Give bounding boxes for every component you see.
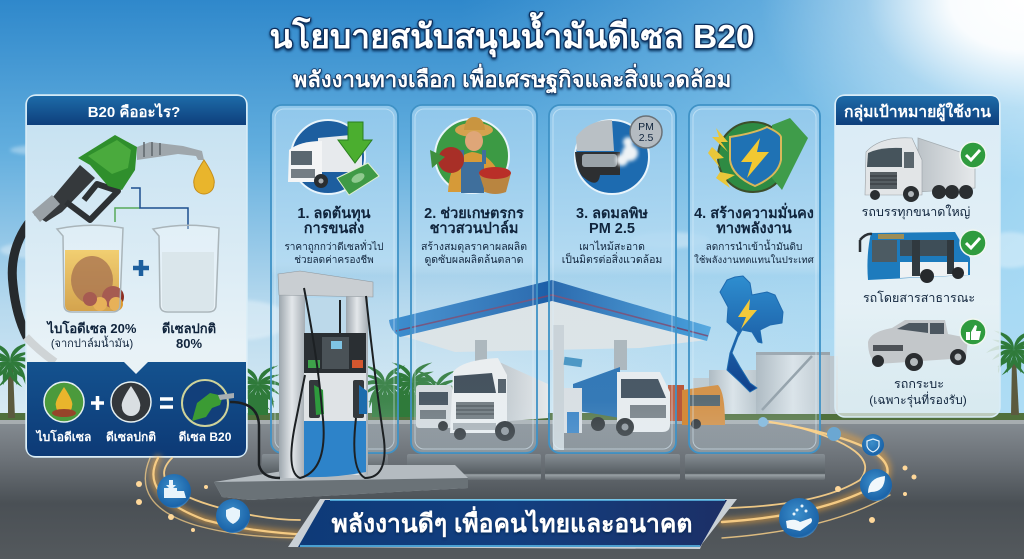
- label: รถบรรทุกขนาดใหญ่: [862, 205, 970, 220]
- icon: farmer with palm fruit: [430, 117, 511, 194]
- background sky: [0, 0, 1024, 425]
- icon: check: [960, 230, 986, 256]
- description line 2: ดูดซับผลผลิตล้นตลาด: [424, 254, 524, 266]
- label: รถกระบะ: [894, 377, 944, 391]
- description line 2: ช่วยลดค่าครองชีพ: [294, 254, 374, 266]
- benefit cards: [262, 105, 825, 480]
- icon: bus: [860, 232, 970, 283]
- icon: hand bubble: [779, 498, 819, 538]
- equals: [160, 399, 173, 407]
- icon: fuel nozzle: [32, 135, 204, 222]
- label note: (เฉพาะรุ่นที่รองรับ): [869, 391, 967, 408]
- icon: truck with down arrow and money: [288, 120, 379, 195]
- card 3: PM 2.5: PM 2.5: [589, 221, 635, 237]
- equation box: [27, 362, 246, 456]
- icon: biodiesel: [44, 382, 84, 422]
- description line 2: ใช้พลังงานทดแทนในประเทศ: [694, 254, 814, 266]
- icon: tiny bubble: [758, 417, 768, 427]
- equation box: ดีเซล B20: [179, 430, 232, 444]
- diesel beaker: [153, 225, 219, 312]
- card base stands: [262, 454, 825, 480]
- heading: 3. ลดมลพิษ: [576, 205, 648, 222]
- diesel label: ดีเซลปกติ: [162, 321, 216, 336]
- diesel label: 80%: [176, 336, 202, 351]
- heading: 4. สร้างความมั่นคง: [694, 202, 814, 222]
- left panel: what is B20: [12, 95, 247, 457]
- icon: diesel: [111, 382, 151, 422]
- small white truck: [416, 385, 452, 431]
- icon: pickup: [868, 320, 968, 371]
- large white truck: [450, 358, 548, 441]
- panel heading: B20 คืออะไร?: [88, 102, 180, 121]
- hose behind panel: [12, 214, 36, 337]
- icon: leaf bubble: [860, 469, 892, 501]
- fuel storage tanks: [693, 352, 838, 414]
- card 1: transport cost: [271, 105, 398, 453]
- icon: thumbs up: [960, 319, 986, 345]
- icon: shield bubble: [216, 499, 250, 533]
- right panel: target users: [835, 95, 1000, 417]
- icon: oil drop: [194, 160, 214, 194]
- equation labels: ไบโอดีเซล: [35, 429, 91, 444]
- biodiesel label: ไบโอดีเซล 20%: [46, 320, 137, 336]
- card 3: PM 2.5: [549, 105, 676, 453]
- pump hose to panel: [230, 402, 280, 478]
- road and roadside: [0, 413, 1024, 559]
- card 4: energy security: ทางพลังงาน: [716, 221, 792, 237]
- gas station canopy: [389, 280, 711, 450]
- panel heading: กลุ่มเป้าหมายผู้ใช้งาน: [844, 102, 991, 123]
- heading: 1. ลดต้นทุน: [297, 205, 371, 222]
- icon: heavy truck: [865, 138, 975, 202]
- icon: small bubble: [827, 427, 841, 441]
- fuel pump: [214, 271, 468, 500]
- plus: [91, 396, 104, 410]
- blue container truck: [573, 367, 670, 436]
- orange truck: [668, 385, 725, 429]
- trucks at the station: [416, 357, 725, 441]
- banner text: พลังงานดีๆ เพื่อคนไทยและอนาคต: [332, 506, 692, 538]
- icon: shield with lightning and map: [708, 118, 808, 192]
- label: รถโดยสารสาธารณะ: [863, 290, 975, 305]
- icon: exhaust and PM badge: [575, 116, 662, 194]
- biodiesel label: (จากปาล์มน้ำมัน): [51, 335, 133, 350]
- bottom banner: [288, 499, 737, 549]
- description: สร้างสมดุลราคาผลผลิต: [421, 241, 527, 253]
- title: นโยบายสนับสนุนน้ำมันดีเซล B20: [269, 12, 755, 58]
- description: ราคาถูกกว่าดีเซลทั่วไป: [284, 239, 384, 253]
- light swirl right: [722, 422, 916, 538]
- description: ลดการนำเข้าน้ำมันดิบ: [706, 239, 802, 253]
- subtitle: พลังงานทางเลือก เพื่อเศรษฐกิจและสิ่งแวดล้อม: [293, 63, 731, 94]
- connector lines: [115, 188, 188, 229]
- description: เผาไหม้สะอาด: [579, 240, 645, 253]
- small station pump: [564, 357, 582, 433]
- biodiesel beaker: [57, 225, 124, 312]
- biodiesel label: [46, 320, 137, 350]
- card 1: transport cost: การขนส่ง: [304, 221, 364, 237]
- diesel label: [162, 321, 216, 351]
- icon: check: [960, 142, 986, 168]
- icon: shield check bubble: [862, 434, 884, 456]
- light swirl left: [136, 458, 310, 538]
- card 2: palm farmers: ชาวสวนปาล์ม: [430, 219, 518, 237]
- palm trees: [0, 325, 1024, 418]
- equation box: ดีเซลปกติ: [106, 430, 156, 444]
- card 2: palm farmers: [411, 105, 537, 453]
- icon: exhaust and PM badge: 2.5: [639, 132, 653, 144]
- plus sign: [133, 260, 149, 276]
- map of Thailand: [720, 276, 783, 392]
- panel header: [27, 96, 246, 125]
- heading: 2. ช่วยเกษตรกร: [424, 206, 524, 222]
- card 4: energy security: [689, 105, 820, 453]
- description line 2: เป็นมิตรต่อสิ่งแวดล้อม: [562, 252, 662, 266]
- icon: B20 nozzle: [182, 380, 234, 426]
- icon: truck bubble: [157, 474, 191, 508]
- icon: exhaust and PM badge: PM: [638, 121, 654, 133]
- floating benefit icons: [157, 417, 892, 538]
